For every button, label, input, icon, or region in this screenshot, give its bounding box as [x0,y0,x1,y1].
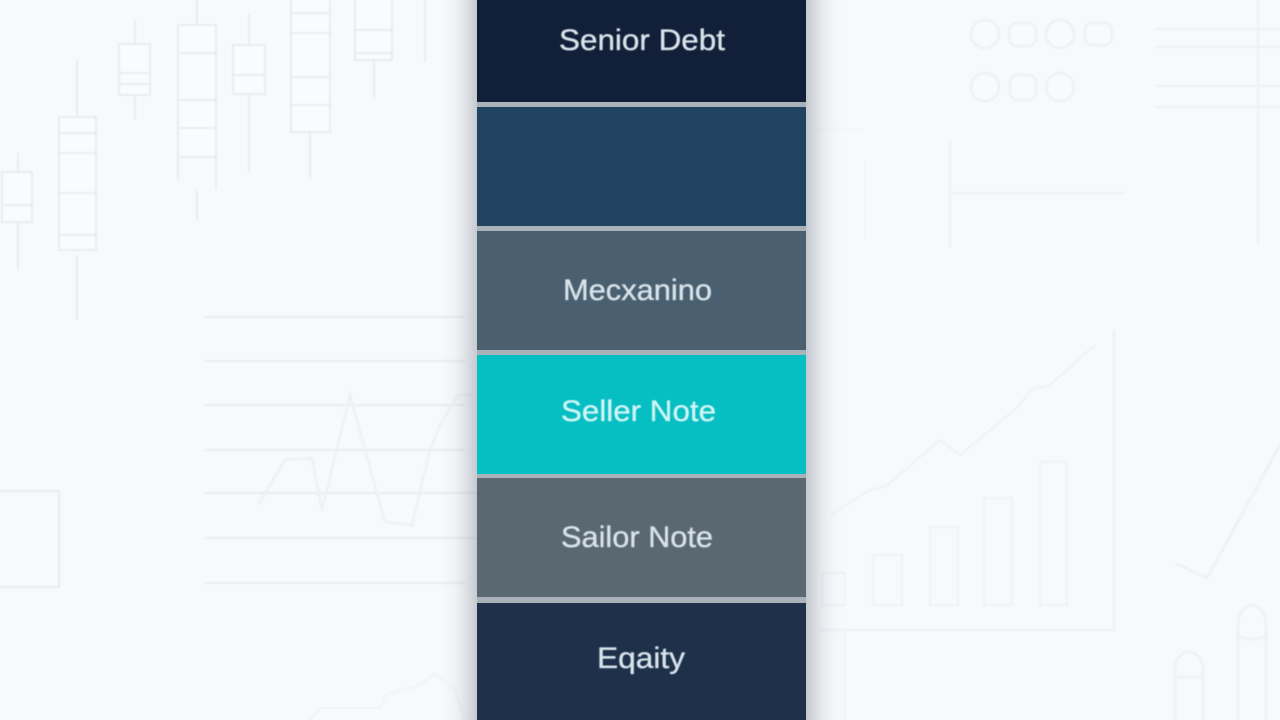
background: top right lines [815,0,1280,248]
segment: equity [477,603,806,720]
background: bottom curve [310,673,465,720]
segment: equity: Eqaity [597,642,685,675]
background: lined line chart [205,317,477,583]
stack dividers backing [477,0,806,720]
segment: grey seller note [477,478,806,597]
segment: senior debt: Senior Debt [559,24,726,57]
segment: mezzanine: Mecxanino [563,274,712,307]
stack drop shadow [474,0,810,720]
background: check line and pills [1175,445,1280,720]
background: candlestick chart [2,0,425,320]
segment: senior debt [477,0,806,102]
segment: grey seller note: Sailor Note [561,521,713,554]
segment: unlabelled blue tier [477,107,806,226]
background: left outlined box [0,491,59,587]
background: icon circles [971,20,1112,101]
segment: mezzanine [477,231,806,350]
background: bar and line chart [820,330,1114,720]
segment: teal seller note: Seller Note [561,395,716,428]
capital stack [477,0,806,720]
segment: teal seller note [477,355,806,474]
